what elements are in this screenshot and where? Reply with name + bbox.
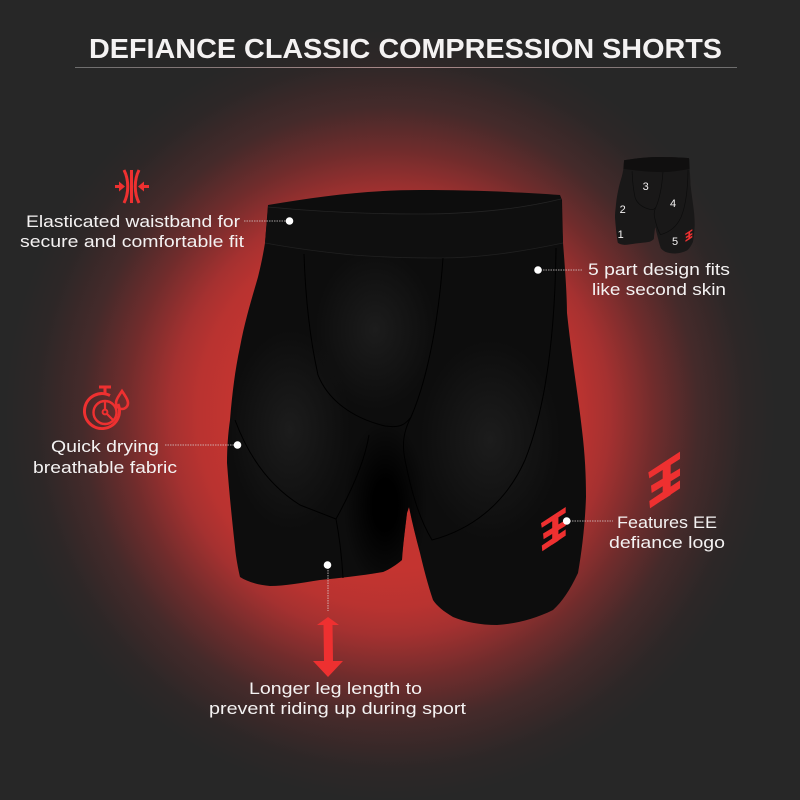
inset: five part diagram: 4 bbox=[670, 198, 676, 210]
callout: waistband text: Elasticated waistband for bbox=[26, 212, 240, 231]
inset number labels: 1 bbox=[618, 229, 624, 241]
inset: five part diagram bbox=[615, 157, 695, 254]
arrow: leg length bbox=[313, 617, 343, 677]
callout: logo text bbox=[609, 513, 725, 552]
main shorts product image bbox=[227, 190, 586, 625]
inset: five part diagram: 2 bbox=[620, 204, 626, 216]
printed logo bbox=[541, 507, 566, 551]
icon: EE defiance logo bbox=[648, 452, 680, 508]
connector: waistband bbox=[244, 217, 293, 225]
title: DEFIANCE CLASSIC COMPRESSION SHORTS bbox=[89, 33, 722, 64]
callout: quick drying text bbox=[33, 437, 178, 477]
icon: stopwatch with droplet bbox=[84, 387, 128, 429]
callout: quick drying text: breathable fabric bbox=[33, 458, 178, 477]
callout: leg length text bbox=[209, 679, 466, 718]
connector: five part design bbox=[534, 266, 582, 274]
callout: waistband text bbox=[20, 212, 244, 251]
icon: elastic waistband bbox=[115, 170, 149, 203]
connector: leg length bbox=[324, 561, 331, 611]
fabric shading bbox=[362, 459, 417, 574]
callout: five part design text: like second skin bbox=[592, 280, 726, 299]
seams bbox=[235, 248, 556, 578]
connector: quick drying bbox=[165, 441, 241, 449]
inset: five part diagram: 5 bbox=[672, 236, 678, 248]
callout: logo text: defiance logo bbox=[609, 533, 725, 552]
callout: leg length text: prevent riding up during sport bbox=[209, 699, 466, 718]
callout: quick drying text: Quick drying bbox=[51, 437, 159, 456]
waistband bbox=[265, 199, 563, 258]
callout: waistband text: secure and comfortable fit bbox=[20, 232, 244, 251]
callout: five part design text bbox=[588, 260, 730, 299]
callout: logo text: Features EE bbox=[617, 513, 717, 532]
callout: five part design text: 5 part design fits bbox=[588, 260, 730, 279]
inset: five part diagram: 3 bbox=[643, 181, 649, 193]
callout: leg length text: Longer leg length to bbox=[249, 679, 422, 698]
connector: logo bbox=[563, 517, 613, 525]
